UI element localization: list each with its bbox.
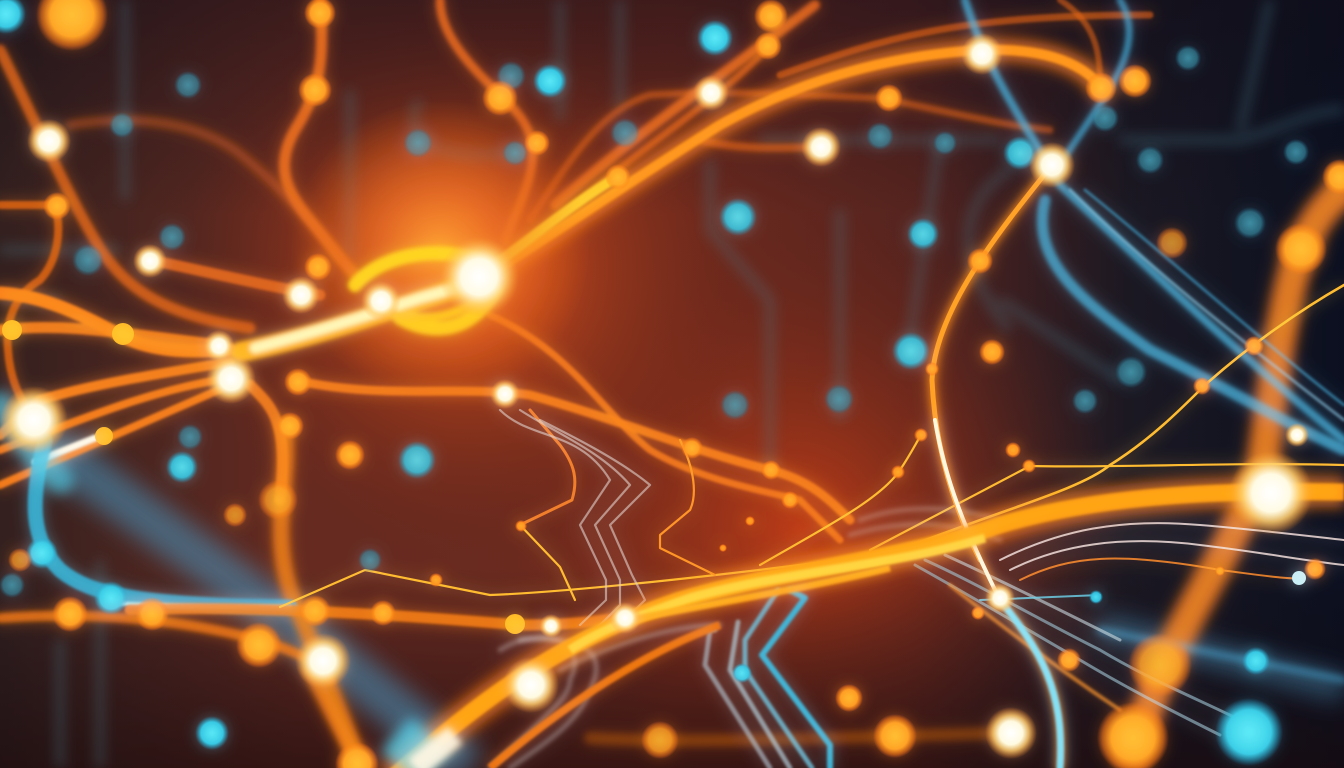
vertical bright filament: [932, 165, 1061, 768]
dim blue nodes: [0, 45, 1309, 598]
blue traces right: [965, 0, 1344, 680]
blurred wide orange bands right: [281, 185, 1344, 768]
blue left trunk: [0, 405, 290, 607]
main left orange strands: [0, 293, 850, 540]
top main thick trunk: [480, 50, 1102, 280]
white circuit traces center: [500, 410, 650, 630]
blue circuit traces bottom: [490, 509, 1000, 768]
thick lower trunk: [390, 492, 1344, 768]
central hub: [240, 100, 590, 400]
thin yellow traces: [280, 285, 1344, 607]
white hot stretch near left node: [35, 438, 95, 462]
bottom orange lines: [0, 605, 1010, 768]
white circuit fan right: [915, 523, 1344, 735]
upper orange traces: [0, 0, 1150, 420]
blue blurred band lower left: [40, 440, 1344, 768]
